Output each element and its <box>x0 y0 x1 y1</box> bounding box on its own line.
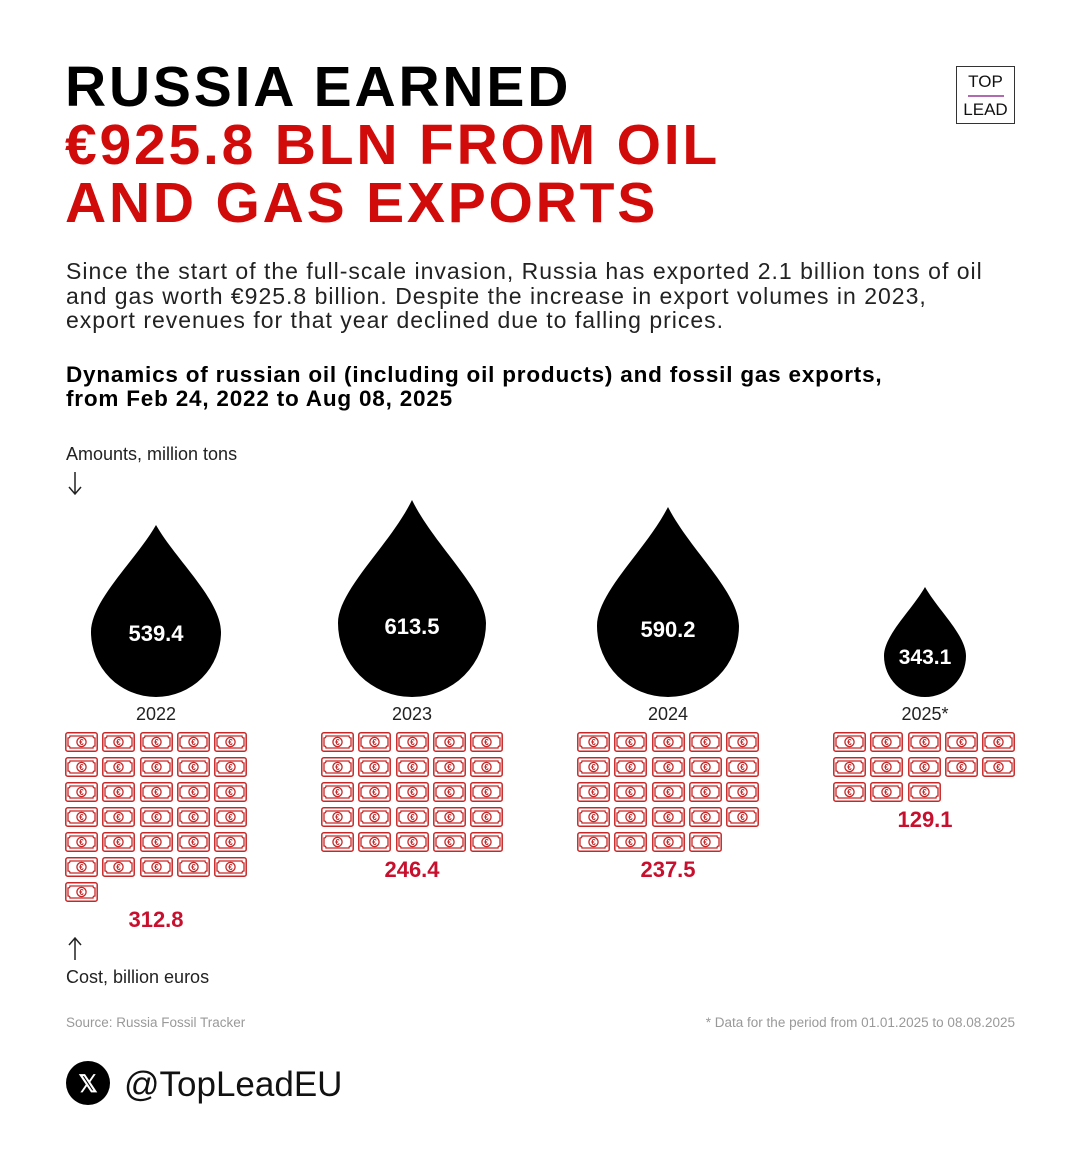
axis label: cost: Cost, billion euros <box>66 967 209 987</box>
drop 2023: 613.5 <box>384 614 440 639</box>
logo: TOP LEAD <box>956 66 1015 124</box>
icon: X logo <box>66 1061 110 1105</box>
drop 2022 <box>91 525 221 697</box>
chart subtitle <box>66 362 882 411</box>
year labels: 2023 <box>392 704 432 724</box>
intro paragraph <box>66 258 983 333</box>
title: RUSSIA EARNED <box>65 55 571 119</box>
handle: @TopLeadEU <box>124 1065 342 1104</box>
cost values: 237.5 <box>640 857 696 882</box>
logo: TOP LEAD: TOP LEAD <box>963 72 1008 118</box>
intro paragraph: export revenues for that year declined due to falling prices. <box>66 307 724 333</box>
cost values <box>128 807 953 932</box>
banknotes 2024 <box>578 733 758 851</box>
cost values: 129.1 <box>897 807 953 832</box>
drop 2024 <box>597 507 739 697</box>
year labels: 2024 <box>648 704 688 724</box>
drop 2023 <box>338 500 486 697</box>
intro paragraph: Since the start of the full-scale invasion, Russia has exported 2.1 billion tons of oil <box>66 258 983 284</box>
chart subtitle: from Feb 24, 2022 to Aug 08, 2025 <box>66 386 453 411</box>
drop 2025 <box>884 587 966 697</box>
drop 2022: 539.4 <box>128 621 184 646</box>
title <box>65 55 720 235</box>
drop 2024: 590.2 <box>640 617 696 642</box>
banknotes 2025 <box>834 733 1014 801</box>
banknotes 2023 <box>322 733 502 851</box>
year labels: 2022 <box>136 704 176 724</box>
year labels: 2025* <box>901 704 949 724</box>
chart subtitle: Dynamics of russian oil (including oil products) and fossil gas exports, <box>66 362 882 387</box>
drop 2025: 343.1 <box>899 646 952 669</box>
icon: X logo: 𝕏 <box>78 1071 98 1098</box>
banknotes 2022 <box>66 733 246 901</box>
axis label: amounts: Amounts, million tons <box>66 444 237 464</box>
title: AND GAS EXPORTS <box>65 171 658 235</box>
axis label: cost <box>66 938 209 987</box>
cost values: 246.4 <box>384 857 440 882</box>
intro paragraph: and gas worth €925.8 billion. Despite the increase in export volumes in 2023, <box>66 282 927 308</box>
axis label: amounts <box>66 444 237 494</box>
year labels <box>136 704 949 724</box>
source note: Source: Russia Fossil Tracker <box>66 1015 246 1030</box>
cost values: 312.8 <box>128 907 184 932</box>
footnote: * Data for the period from 01.01.2025 to 08.08.2025 <box>706 1015 1015 1030</box>
title: €925.8 BLN FROM OIL <box>65 113 720 177</box>
